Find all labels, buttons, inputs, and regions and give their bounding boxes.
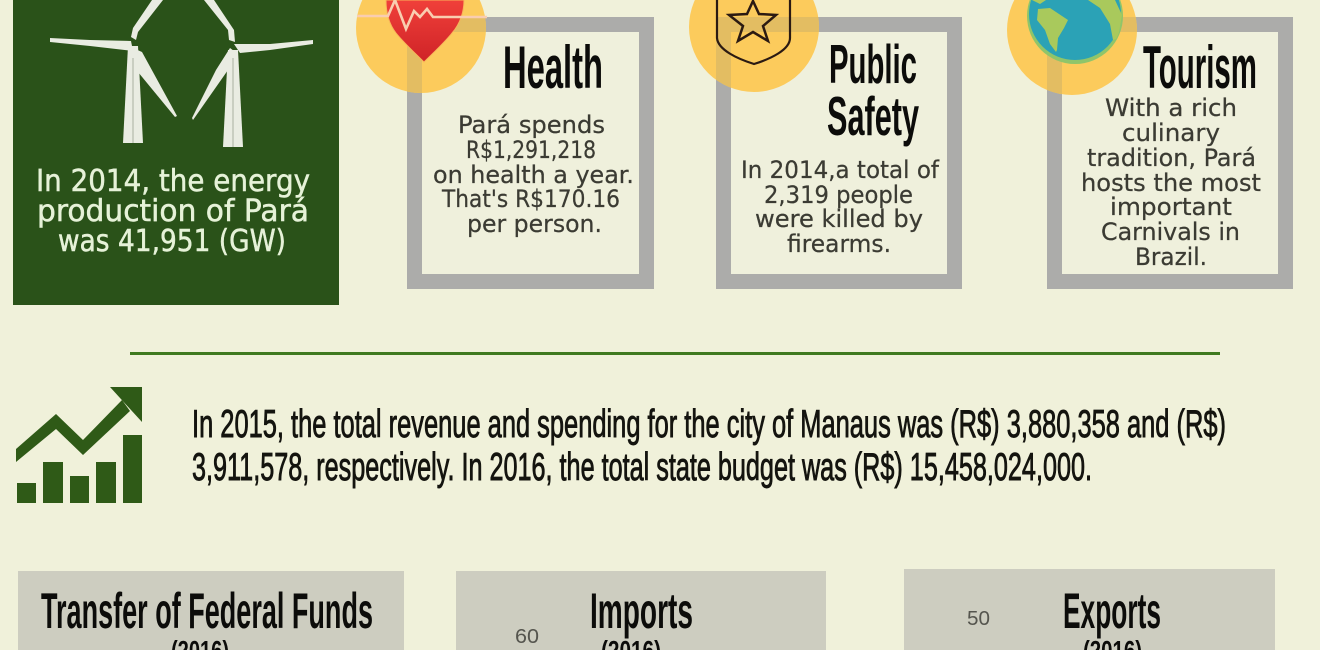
icon: heart on yellow circle [356, 0, 487, 93]
exports axis label: 50 [967, 608, 990, 630]
exports title: Exports [1063, 583, 1161, 639]
icon: shield with star on yellow circle [689, 0, 819, 92]
health text: That's R$170.16 [441, 185, 620, 213]
safety text [741, 156, 940, 258]
tourism text: Brazil. [1135, 243, 1207, 271]
energy text: was 41,951 (GW) [58, 224, 286, 259]
safety title: Public [829, 33, 917, 95]
icon: wind turbines [50, 0, 313, 147]
panel: tourism [1007, 0, 1286, 282]
safety text: In 2014,a total of [741, 156, 940, 184]
health text: per person. [467, 210, 602, 238]
energy text [36, 164, 310, 259]
federal funds title: Transfer of Federal Funds [41, 583, 373, 639]
panel: transfer of federal funds [18, 571, 404, 650]
tourism text: tradition, Pará [1087, 144, 1256, 172]
tourism text: culinary [1122, 119, 1220, 147]
tourism text: Carnivals in [1101, 218, 1240, 246]
panel: imports [456, 571, 826, 650]
tourism text: hosts the most [1081, 169, 1261, 197]
panel: energy production [13, 0, 339, 305]
tourism frame [1054, 24, 1286, 282]
health text [433, 111, 634, 238]
panel: health [356, 0, 646, 282]
tourism text [1081, 94, 1261, 271]
panel: exports [904, 569, 1275, 650]
health frame [414, 24, 646, 282]
safety title [827, 33, 919, 147]
safety frame [724, 24, 954, 282]
energy text: In 2014, the energy [36, 164, 310, 199]
safety text: were killed by [755, 205, 923, 233]
icon: growth chart with arrow [16, 387, 142, 503]
revenue and budget text [192, 403, 1226, 489]
energy text: production of Pará [37, 194, 309, 229]
tourism text: important [1110, 193, 1232, 221]
safety title: Safety [827, 85, 919, 147]
health text: on health a year. [433, 161, 634, 189]
tourism text: With a rich [1105, 94, 1237, 122]
imports title: Imports [590, 583, 693, 639]
imports axis label: 60 [515, 626, 539, 648]
health title: Health [503, 34, 603, 101]
safety text: 2,319 people [764, 181, 913, 209]
panel: public safety [689, 0, 954, 282]
health text: R$1,291,218 [466, 136, 596, 164]
health text: Pará spends [458, 111, 605, 139]
icon: globe on yellow circle [1007, 0, 1137, 95]
safety text: firearms. [787, 230, 891, 258]
